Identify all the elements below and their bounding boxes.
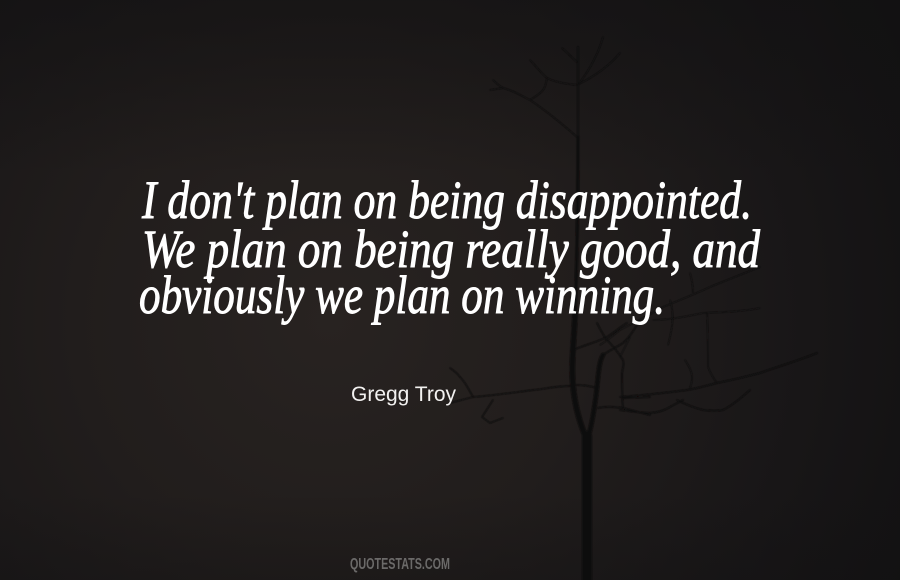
author name: Gregg Troy bbox=[351, 383, 456, 406]
far right faint branches bbox=[600, 267, 760, 388]
lower left branches bbox=[450, 368, 570, 423]
tree trunk and fork bbox=[572, 47, 603, 580]
illustration: bare tree silhouette bbox=[450, 37, 817, 580]
quote text bbox=[139, 170, 761, 325]
watermark: source site: QUOTESTATS.COM bbox=[350, 556, 450, 573]
quote line 1: I don't plan on being disappointed. bbox=[141, 170, 752, 230]
lower right branches bbox=[573, 320, 817, 415]
quote line 2: We plan on being really good, and bbox=[142, 219, 761, 279]
quote line 3: obviously we plan on winning. bbox=[139, 265, 665, 325]
upper branches bbox=[490, 37, 620, 137]
